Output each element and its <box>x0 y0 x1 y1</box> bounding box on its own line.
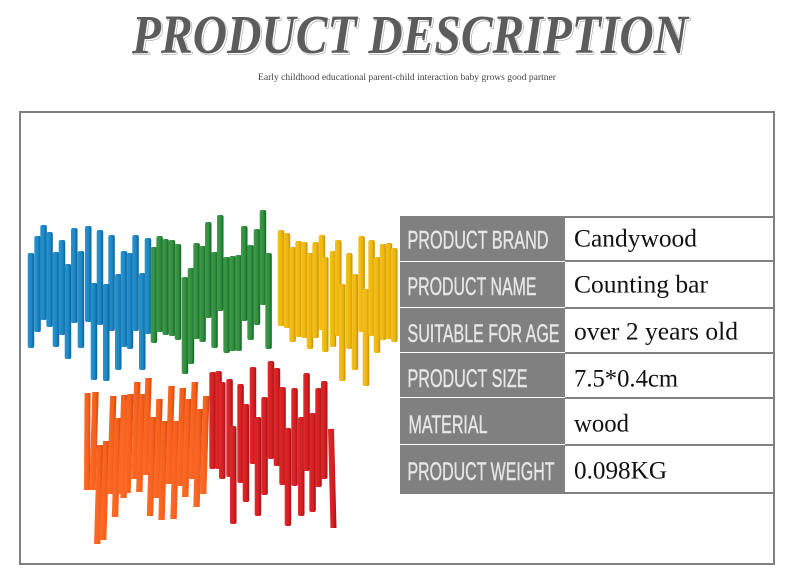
sticks: yellow group <box>278 230 398 386</box>
row: product weight: PRODUCT WEIGHT <box>408 458 554 486</box>
label column <box>400 216 565 494</box>
title: PRODUCT DESCRIPTION <box>133 6 691 66</box>
row: material: wood <box>574 411 629 438</box>
row: product name: Counting bar <box>574 271 709 298</box>
row: product size: PRODUCT SIZE <box>408 365 528 393</box>
row: material: MATERIAL <box>408 411 488 439</box>
row: material <box>408 411 629 439</box>
row: suitable age <box>408 318 738 348</box>
row: product brand: PRODUCT BRAND <box>408 226 548 254</box>
title: PRODUCT DESCRIPTION <box>131 4 690 65</box>
row: product weight: 0.098KG <box>574 457 667 484</box>
sticks: red group <box>209 361 336 528</box>
row: product name: PRODUCT NAME <box>408 273 536 301</box>
row: product brand: Candywood <box>574 226 698 253</box>
row: product size <box>408 365 679 393</box>
specification table <box>400 216 774 494</box>
sticks: blue group <box>28 225 151 381</box>
row: suitable age: over 2 years old <box>574 318 738 345</box>
row: product name <box>408 271 709 301</box>
panel: product frame <box>20 112 774 564</box>
sticks: orange group <box>84 378 209 544</box>
subtitle: Early childhood educational parent-child interaction baby grows good partner <box>258 73 557 83</box>
row: suitable age: SUITABLE FOR AGE <box>408 320 560 348</box>
sticks: green group <box>151 210 272 374</box>
row: product size: 7.5*0.4cm <box>574 366 679 393</box>
